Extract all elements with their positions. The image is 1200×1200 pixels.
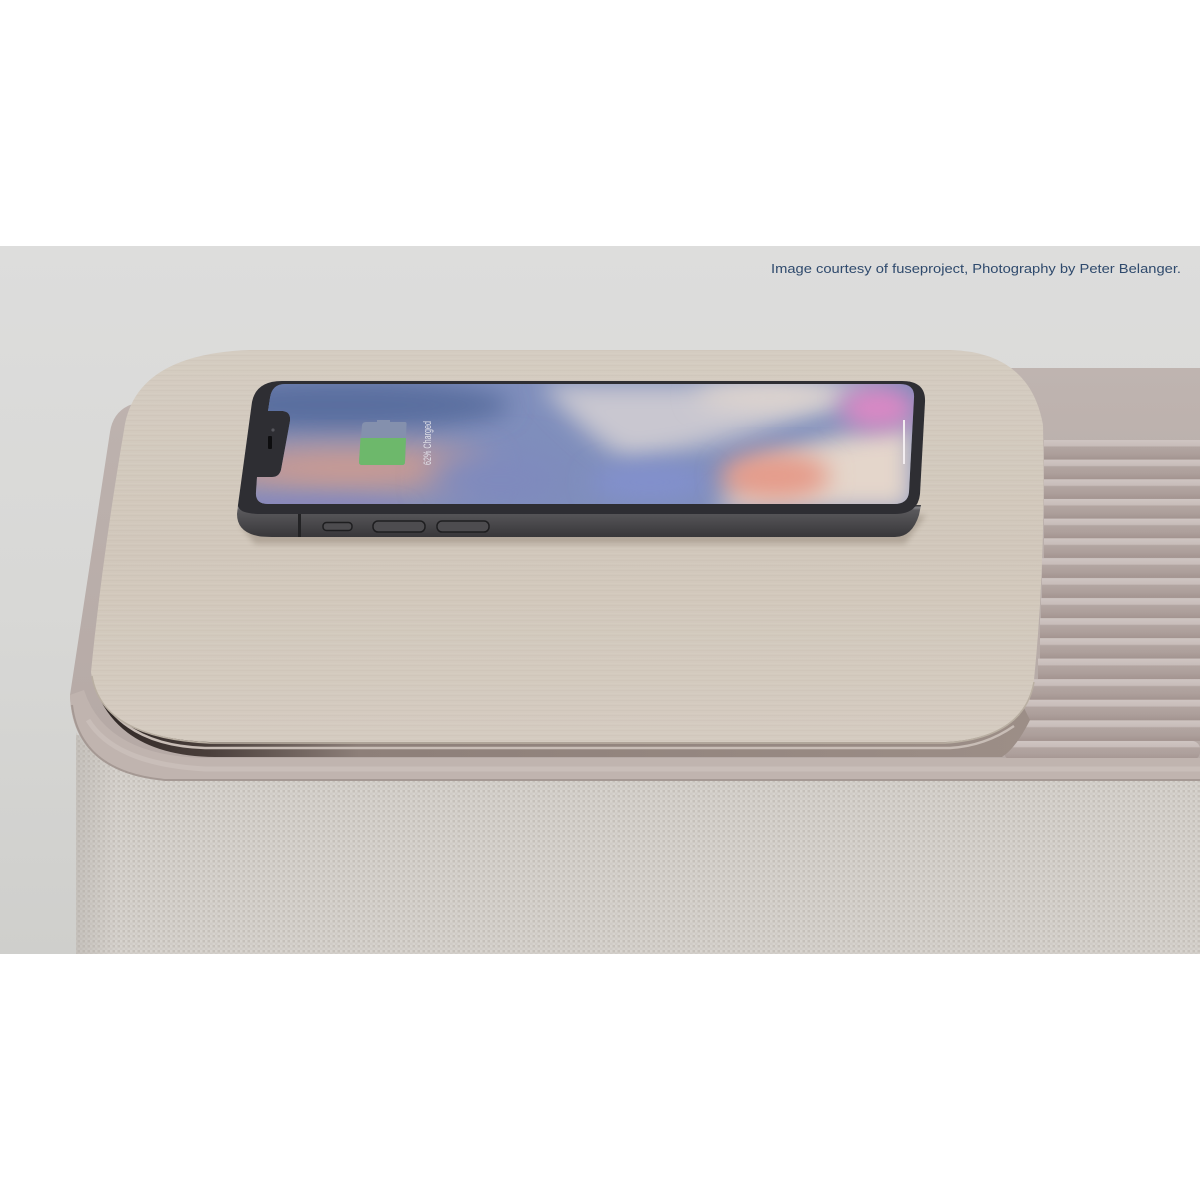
phone side frame [237, 505, 921, 537]
phone shadow [240, 515, 926, 544]
background wall [0, 246, 1200, 954]
vent ribs [1004, 440, 1200, 760]
air purifier top body [70, 368, 1200, 778]
phone glass [238, 381, 925, 514]
shadow gap beneath lid [102, 702, 1030, 757]
rubber rim [70, 690, 1200, 780]
fabric front panel [76, 732, 1200, 954]
antenna band [298, 514, 301, 537]
side buttons [323, 521, 489, 532]
charge percentage text: 62% Charged [422, 421, 434, 465]
phone screen [256, 384, 914, 504]
photo credit: Image courtesy of fuseproject, Photography by Peter Belanger. [771, 261, 1181, 276]
battery icon [359, 420, 407, 465]
home indicator [903, 420, 905, 464]
smartphone [170, 379, 925, 537]
product photograph [0, 246, 1200, 954]
wooden charging lid [91, 350, 1044, 743]
earpiece and camera [268, 428, 275, 449]
